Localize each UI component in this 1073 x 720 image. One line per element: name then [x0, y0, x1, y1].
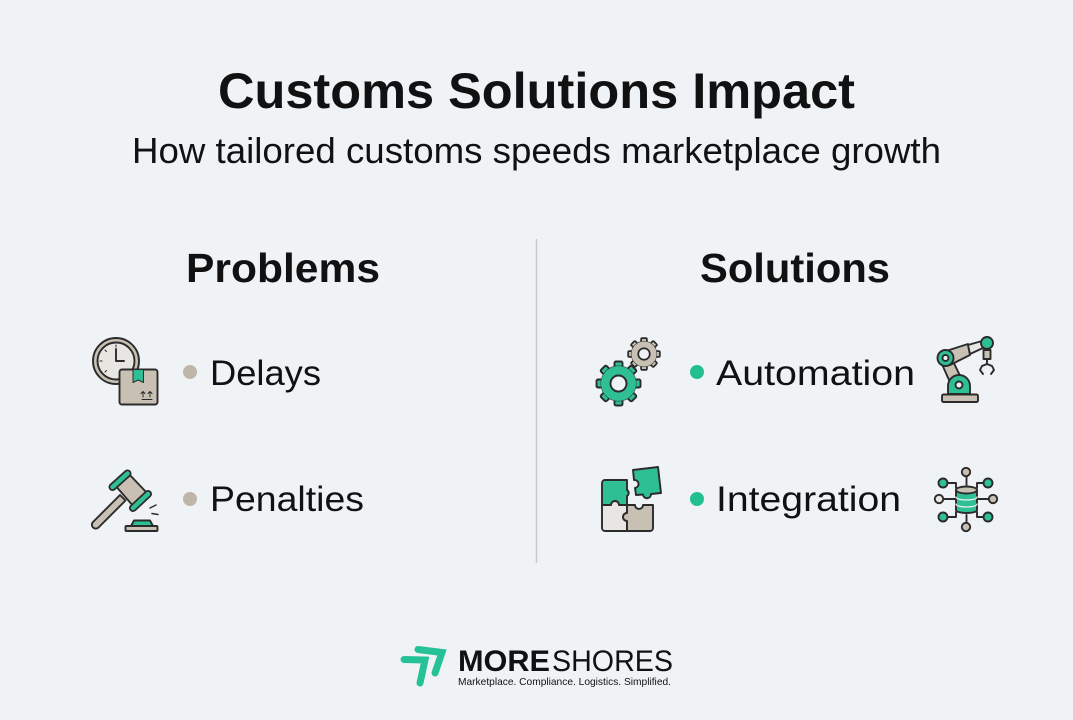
panel: problems: [92, 245, 380, 531]
label: delays: Delays: [210, 354, 321, 393]
icon: puzzle: [602, 467, 661, 531]
icon: database network: [935, 468, 997, 531]
wordmark: more: MORE: [458, 645, 550, 678]
icon: gears: [596, 338, 660, 406]
label: automation: Automation: [716, 354, 915, 393]
icon: robot arm: [938, 337, 994, 402]
heading: problems: Problems: [186, 245, 380, 291]
bullet: delays: [183, 365, 197, 379]
bullet: automation: [690, 365, 704, 379]
label: integration: Integration: [716, 480, 901, 519]
wordmark: shores: SHORES: [552, 645, 673, 678]
panel: solutions: [596, 245, 997, 531]
icon: gavel: [92, 473, 158, 531]
tagline: Marketplace. Compliance. Logistics. Simplified.: [458, 676, 671, 688]
subtitle: How tailored customs speeds marketplace growth: [132, 130, 941, 171]
icon: clock and parcel: [93, 338, 158, 404]
bullet: penalties: [183, 492, 197, 506]
label: penalties: Penalties: [210, 480, 364, 519]
bullet: integration: [690, 492, 704, 506]
logo: MoreShores: [404, 645, 673, 688]
logo mark: arrows: [404, 650, 442, 683]
title: Customs Solutions Impact: [218, 63, 855, 119]
heading: solutions: Solutions: [700, 245, 890, 291]
